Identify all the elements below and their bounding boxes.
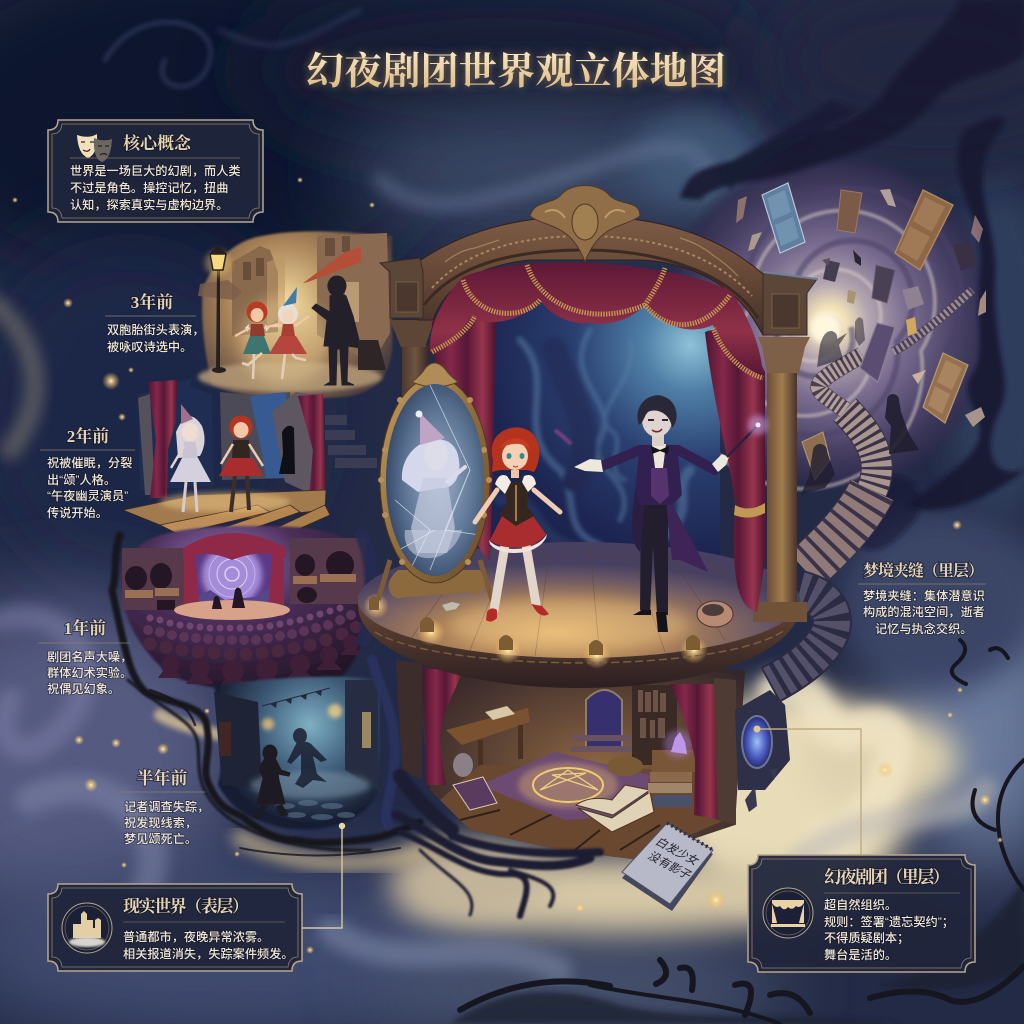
vignette: 2 years ago torn stage bbox=[123, 378, 377, 538]
ink tendrils binding the timeline bbox=[112, 535, 420, 856]
stage backdrop bbox=[480, 300, 720, 570]
white haired twin bbox=[170, 404, 211, 512]
street lamp bbox=[205, 245, 231, 373]
ritual rug and glowing circle bbox=[480, 752, 650, 820]
full-length mirror bbox=[378, 363, 492, 600]
panel: phantom troupe: 不得质疑剧本； bbox=[824, 930, 909, 945]
twin sisters bbox=[235, 287, 309, 379]
door: blue bbox=[762, 183, 805, 253]
dream rift: swirling vortex bbox=[658, 150, 1002, 494]
right column bbox=[753, 337, 810, 622]
ghost reflection bbox=[402, 410, 465, 558]
bookshelf bbox=[632, 685, 677, 765]
icon: curtain bbox=[763, 888, 813, 938]
panel: real world bbox=[48, 884, 302, 971]
indigo smoke between alley and stage bbox=[362, 535, 410, 825]
timeline: 1 year ago: 剧团名声大噪， bbox=[47, 649, 132, 664]
right curtain bbox=[705, 330, 765, 612]
timeline: 3 years ago: 3年前 bbox=[131, 292, 173, 312]
label: dream rift: 构成的混沌空间，逝者 bbox=[863, 604, 985, 619]
faint stairs beside the stage bbox=[325, 415, 377, 468]
text: phantom troupe: 超自然组织。 bbox=[824, 897, 897, 912]
panel: core concept bbox=[48, 120, 263, 222]
open book bbox=[576, 785, 654, 832]
stage floor rim bbox=[358, 595, 800, 688]
magician bbox=[555, 395, 768, 632]
crest ornament bbox=[530, 186, 640, 262]
panel: core concept: 不过是角色。操控记忆，扭曲 bbox=[70, 180, 228, 195]
panel: phantom troupe: 舞台是活的。 bbox=[824, 947, 897, 962]
rim carving bbox=[375, 630, 785, 663]
timeline: 1 year ago: 1年前 bbox=[64, 618, 106, 638]
timeline: half a year ago: 梦见颂死亡。 bbox=[124, 831, 197, 846]
panel: phantom troupe bbox=[748, 855, 975, 972]
panel: real world: 相关报道消失，失踪案件频发。 bbox=[123, 946, 294, 961]
arched mirror portal bbox=[586, 690, 622, 750]
left block bbox=[380, 258, 423, 318]
text: core concept: 世界是一场巨大的幻剧，而人类 bbox=[70, 163, 241, 178]
floor planks bbox=[440, 765, 725, 860]
timeline: half a year ago: 记者调查失踪， bbox=[124, 799, 209, 814]
mirror cracks bbox=[390, 385, 480, 570]
shards on floor bbox=[442, 602, 460, 611]
stack of books and crystal bbox=[648, 730, 696, 807]
timeline: 2 years ago: 传说开始。 bbox=[47, 505, 108, 520]
door: lower brown bbox=[923, 353, 968, 423]
vignette: 3 years ago street bbox=[198, 231, 392, 399]
footlights bbox=[363, 593, 708, 669]
timeline: 1 year ago: 祝偶见幻象。 bbox=[47, 681, 120, 696]
closed spellbook bbox=[453, 777, 497, 810]
audience rows bbox=[146, 604, 344, 632]
panel: phantom troupe: 规则：签署“遗忘契约”； bbox=[824, 914, 954, 929]
timeline: 3 years ago: 被咏叹诗选中。 bbox=[107, 339, 192, 354]
timeline: 1 year ago bbox=[38, 618, 132, 696]
panel: core concept: 认知，探索真实与虚构边界。 bbox=[70, 197, 228, 212]
dark ink smoke around the rift bbox=[680, 0, 1024, 550]
timeline: 2 years ago: 2年前 bbox=[67, 426, 109, 446]
left curtain bbox=[432, 308, 495, 560]
label: dream rift: 记忆与执念交织。 bbox=[875, 621, 972, 636]
label: dream rift: 梦境夹缝：集体潜意识 bbox=[863, 588, 985, 603]
timeline: 2 years ago: “午夜幽灵演员” bbox=[47, 488, 128, 503]
timeline: 1 year ago: 群体幻术实验。 bbox=[47, 665, 132, 680]
timeline: 2 years ago: 出“颂”人格。 bbox=[47, 472, 116, 487]
stage lower level: the troupe's backroom bbox=[396, 660, 790, 870]
carved steps bbox=[570, 735, 632, 752]
timeline: half a year ago: 半年前 bbox=[136, 768, 188, 788]
notepad: clue note: 白发少女 bbox=[653, 835, 701, 869]
timeline: half a year ago: 祝发现线索， bbox=[124, 815, 197, 830]
vignette: half a year ago foggy alley bbox=[214, 677, 380, 829]
backdrop smoke bbox=[500, 330, 690, 550]
icon: theatre masks bbox=[77, 134, 112, 162]
portal mirror bbox=[720, 690, 790, 820]
carved side pillars bbox=[396, 660, 422, 780]
timeline: 3 years ago: 双胞胎街头表演， bbox=[107, 322, 204, 337]
heading: core concept: 核心概念 bbox=[123, 133, 192, 153]
main stage bbox=[358, 186, 817, 688]
gold fringe bbox=[432, 265, 763, 378]
stage floor bbox=[358, 542, 800, 658]
ink strands dripping beneath the room bbox=[396, 776, 600, 916]
shadow figures in the vortex bbox=[801, 317, 919, 494]
spiral staircase bbox=[770, 290, 972, 685]
text: real world: 普通都市，夜晚异常浓雾。 bbox=[123, 929, 269, 944]
valance swags bbox=[430, 263, 763, 377]
ink calligraphy strokes bbox=[450, 640, 1024, 1024]
right block bbox=[763, 272, 817, 335]
notepad: clue note bbox=[622, 823, 713, 911]
floating light motes bbox=[12, 177, 1003, 954]
timeline: 2 years ago bbox=[40, 426, 135, 520]
left column bbox=[390, 320, 435, 415]
proscenium arch bbox=[380, 216, 817, 335]
heroine: red haired girl bbox=[475, 427, 560, 622]
heading: phantom troupe: 幻夜剧团（里层） bbox=[824, 867, 950, 887]
leather bag bbox=[607, 756, 643, 776]
leader line: troupe bbox=[754, 726, 861, 855]
label: dream rift bbox=[858, 561, 986, 636]
desk bbox=[446, 708, 530, 745]
door: large brown bbox=[895, 190, 953, 270]
label: dream rift: 梦境夹缝（里层） bbox=[863, 561, 984, 580]
title: 幻夜剧团世界观立体地图 bbox=[306, 51, 726, 93]
vignette: 1 year ago packed theatre bbox=[122, 526, 369, 691]
leader line: real world bbox=[302, 823, 345, 928]
heading: real world: 现实世界（表层） bbox=[123, 896, 249, 916]
lower curtains bbox=[424, 668, 463, 785]
timeline: half a year ago bbox=[120, 768, 209, 846]
timeline: 2 years ago: 祝被催眠，分裂 bbox=[47, 455, 132, 470]
notepad: clue note: 没有影子 bbox=[646, 849, 694, 883]
shadowy poet bbox=[312, 276, 361, 385]
reporter silhouette and shadow bbox=[253, 745, 290, 819]
red haired twin bbox=[219, 416, 263, 512]
floating doors bbox=[736, 183, 986, 494]
top hat on stage bbox=[697, 601, 733, 627]
timeline: 3 years ago bbox=[105, 292, 204, 354]
broken plank floor bbox=[123, 490, 330, 538]
icon: city in fog bbox=[62, 903, 112, 953]
